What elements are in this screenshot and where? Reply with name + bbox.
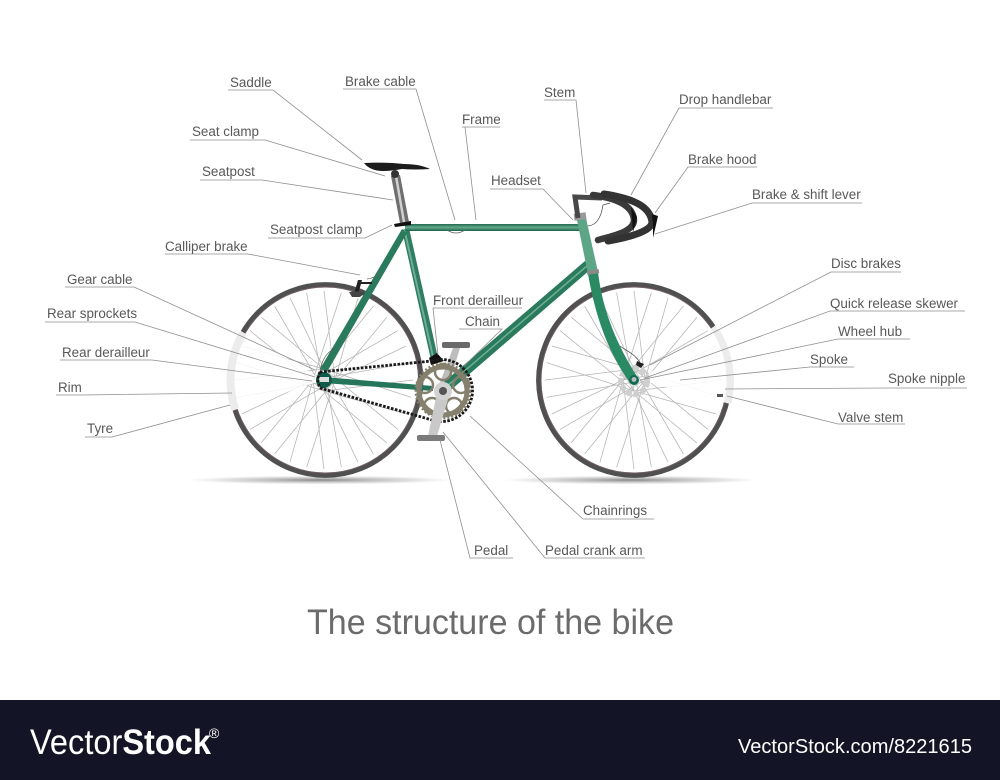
label: Brake and shift lever bbox=[655, 187, 862, 234]
front hub bbox=[629, 375, 639, 385]
label: Disc brakes: Disc brakes bbox=[831, 256, 901, 271]
label: Seat clamp bbox=[190, 124, 385, 176]
label: Wheel hub: Wheel hub bbox=[838, 324, 902, 339]
label: Stem: Stem bbox=[544, 85, 575, 100]
fork bbox=[588, 272, 638, 384]
label: Headset bbox=[490, 173, 573, 220]
chain stay bbox=[323, 377, 433, 391]
brake cable loop bbox=[447, 230, 465, 233]
label: Spoke nipple: Spoke nipple bbox=[888, 371, 965, 386]
footer logo: VectorStock bbox=[30, 723, 211, 762]
label: Rim: Rim bbox=[58, 380, 82, 395]
label: Chainrings bbox=[470, 416, 654, 519]
label: Wheel hub bbox=[640, 324, 910, 380]
label: Pedal crank arm bbox=[443, 432, 645, 558]
label: Brake and shift lever: Brake & shift lever bbox=[752, 187, 861, 202]
seat stay bbox=[320, 229, 407, 372]
calliper brake bbox=[320, 271, 382, 372]
label: Rear derailleur: Rear derailleur bbox=[62, 345, 150, 360]
label: Front derailleur: Front derailleur bbox=[433, 293, 524, 308]
near drop bbox=[604, 194, 652, 241]
rear wheel bbox=[225, 284, 421, 476]
label: Rear derailleur bbox=[60, 345, 312, 381]
label: Calliper brake: Calliper brake bbox=[165, 239, 248, 254]
ground shadows bbox=[185, 476, 760, 484]
bike frame bbox=[316, 212, 639, 396]
stem bbox=[575, 197, 602, 218]
seatpost and clamp bbox=[391, 170, 411, 227]
label: Calliper brake bbox=[165, 239, 360, 275]
label: Valve stem bbox=[727, 396, 905, 425]
levers bbox=[631, 207, 637, 232]
label: Brake cable: Brake cable bbox=[345, 74, 416, 89]
label: Tyre: Tyre bbox=[87, 421, 113, 436]
handlebar and stem bbox=[575, 194, 658, 241]
rear dropout bbox=[316, 372, 332, 388]
label: Spoke: Spoke bbox=[810, 352, 848, 367]
label: Chain: Chain bbox=[465, 314, 500, 329]
label: Brake cable bbox=[343, 74, 455, 220]
label: Quick release skewer bbox=[645, 296, 965, 378]
label: Seatpost clamp: Seatpost clamp bbox=[270, 222, 362, 237]
label: Frame: Frame bbox=[462, 112, 501, 127]
label: Stem bbox=[544, 85, 586, 193]
saddle bbox=[364, 163, 430, 171]
label: Saddle: Saddle bbox=[230, 75, 272, 90]
front wheel bbox=[538, 284, 737, 476]
chain bbox=[318, 360, 473, 421]
label: Seatpost clamp bbox=[268, 222, 392, 238]
label: Pedal crank arm: Pedal crank arm bbox=[545, 543, 642, 558]
label: Pedal bbox=[440, 440, 513, 558]
label: Spoke bbox=[680, 352, 854, 380]
top tube bbox=[405, 224, 580, 231]
disc brake bbox=[620, 346, 647, 394]
pedal and crank: far side bbox=[438, 342, 470, 391]
label: Front derailleur bbox=[433, 293, 524, 355]
registered mark: ® bbox=[209, 725, 220, 741]
label: Drop handlebar: Drop handlebar bbox=[679, 92, 772, 107]
down tube bbox=[437, 261, 591, 396]
label: Pedal: Pedal bbox=[474, 543, 508, 558]
chainring bbox=[416, 364, 470, 418]
label: Frame bbox=[462, 112, 501, 220]
label: Seat clamp: Seat clamp bbox=[192, 124, 259, 139]
cables bbox=[588, 203, 610, 226]
far drop bbox=[593, 195, 634, 240]
label: Quick release skewer: Quick release skewer bbox=[830, 296, 959, 311]
label: Disc brakes bbox=[650, 256, 901, 365]
label: Seatpost bbox=[200, 164, 393, 200]
label: Chainrings: Chainrings bbox=[583, 503, 647, 518]
head tube bbox=[577, 218, 598, 274]
label: Gear cable bbox=[65, 272, 315, 370]
title: The structure of the bike bbox=[307, 603, 674, 642]
label: Brake hood: Brake hood bbox=[688, 152, 756, 167]
label: Gear cable: Gear cable bbox=[67, 272, 133, 287]
label: Valve stem: Valve stem bbox=[838, 410, 903, 425]
footer url: VectorStock.com/8221615 bbox=[738, 735, 972, 758]
label: Rear sprockets: Rear sprockets bbox=[47, 306, 137, 321]
label: Chain bbox=[459, 314, 502, 366]
label: Saddle bbox=[228, 75, 362, 160]
label: Drop handlebar bbox=[631, 92, 773, 195]
footer bar bbox=[0, 700, 1000, 780]
head set bbox=[587, 269, 599, 275]
crank and near pedal bbox=[417, 382, 452, 441]
label: Tyre bbox=[85, 405, 230, 437]
label: Brake hood bbox=[655, 152, 757, 213]
seat tube bbox=[402, 228, 438, 360]
label: Rear sprockets bbox=[45, 306, 315, 377]
label: Seatpost: Seatpost bbox=[202, 164, 255, 179]
label: Headset: Headset bbox=[491, 173, 541, 188]
bottom lug bbox=[429, 353, 444, 365]
